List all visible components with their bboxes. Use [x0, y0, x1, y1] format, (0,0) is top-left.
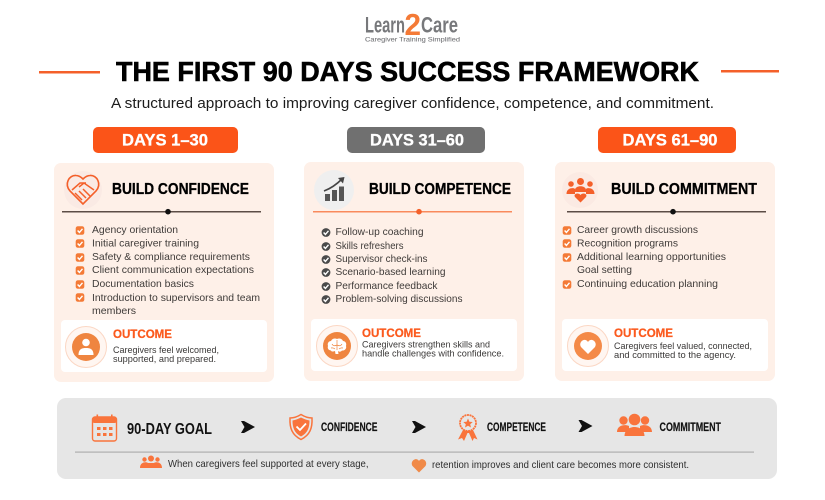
checklist: Scenario-based learning: [336, 266, 446, 278]
logo: [365, 7, 460, 44]
checklist: Follow-up coaching: [336, 226, 424, 238]
checklist: Skills refreshers: [336, 240, 404, 252]
checklist: Continuing education planning: [577, 278, 718, 290]
badge: days 61-90: DAYS 61–90: [622, 132, 718, 150]
checklist: Documentation basics: [92, 278, 194, 290]
checklist: Career growth discussions: [577, 224, 698, 236]
outcome box: OUTCOME: [362, 326, 421, 340]
checklist: Agency orientation: [92, 224, 178, 236]
outcome box: OUTCOME: [113, 327, 172, 341]
checklist: Problem-solving discussions: [336, 293, 462, 305]
checklist: Goal setting: [577, 264, 632, 276]
checklist: Introduction to supervisors and team: [92, 292, 260, 304]
title: THE FIRST 90 DAYS SUCCESS FRAMEWORK: [116, 56, 699, 87]
panel: build confidence: [54, 163, 274, 382]
outcome box: [61, 320, 267, 372]
statement start: When caregivers feel supported at every stage,: [168, 458, 368, 470]
outcome box: Caregivers feel welcomed,: [113, 345, 219, 356]
checklist: Additional learning opportunities: [577, 251, 726, 263]
checklist: members: [92, 305, 136, 317]
icon: heart: [412, 459, 426, 472]
heading: BUILD COMPETENCE: [369, 181, 511, 198]
outcome box: OUTCOME: [614, 326, 673, 340]
icon: team with heart: [562, 172, 598, 208]
checklist: Client communication expectations: [92, 264, 254, 276]
outcome box: and committed to the agency.: [614, 350, 736, 361]
icon: award ribbon: [458, 415, 478, 441]
panel: build competence: [304, 162, 524, 381]
checklist: [563, 224, 726, 290]
statement end: retention improves and client care becomes more consistent.: [432, 459, 689, 471]
checklist: Recognition programs: [577, 238, 678, 250]
checklist: Safety & compliance requirements: [92, 251, 250, 263]
label: 90-day goal: 90-DAY GOAL: [127, 421, 212, 438]
checklist: Performance feedback: [336, 280, 438, 292]
icon: team: [617, 414, 652, 436]
logo: Care: [421, 12, 458, 38]
subtitle: A structured approach to improving caregiver confidence, competence, and commitment.: [111, 96, 714, 112]
badge: days 31-60: DAYS 31–60: [370, 132, 464, 150]
icon: handshake heart: [64, 171, 102, 209]
logo: 2: [404, 7, 421, 42]
badge: days 61-90: [598, 127, 736, 153]
icon: shield: [290, 414, 312, 440]
label: confidence: CONFIDENCE: [321, 422, 378, 434]
label: competence: COMPETENCE: [487, 422, 546, 434]
logo: Learn: [365, 12, 405, 38]
heading: BUILD COMMITMENT: [611, 181, 757, 198]
checklist: [322, 226, 462, 305]
badge: days 1-30: DAYS 1–30: [122, 132, 208, 150]
icon: growth chart: [314, 170, 354, 210]
logo: Caregiver Training Simplified: [365, 36, 460, 44]
checklist: Supervisor check-ins: [336, 253, 428, 265]
icon: calendar: [92, 414, 116, 441]
outcome box: [311, 319, 517, 371]
arrow: [412, 421, 426, 433]
outcome box: [562, 319, 768, 371]
checklist: Initial caregiver training: [92, 238, 199, 250]
badge: days 1-30: [93, 127, 238, 153]
outcome box: supported, and prepared.: [113, 354, 216, 365]
checklist: [76, 224, 260, 317]
panel: build commitment: [555, 162, 775, 381]
badge: days 31-60: [347, 127, 485, 153]
arrow: [578, 420, 592, 432]
arrow: [241, 421, 255, 433]
outcome box: handle challenges with confidence.: [362, 348, 504, 360]
panel: 90-day goal: [57, 398, 777, 479]
icon: small team: [140, 456, 162, 468]
outcome box: Caregivers feel valued, connected,: [614, 341, 752, 352]
outcome box: Caregivers strengthen skills and: [362, 340, 490, 350]
heading: BUILD CONFIDENCE: [112, 181, 249, 198]
label: commitment: COMMITMENT: [660, 422, 721, 434]
